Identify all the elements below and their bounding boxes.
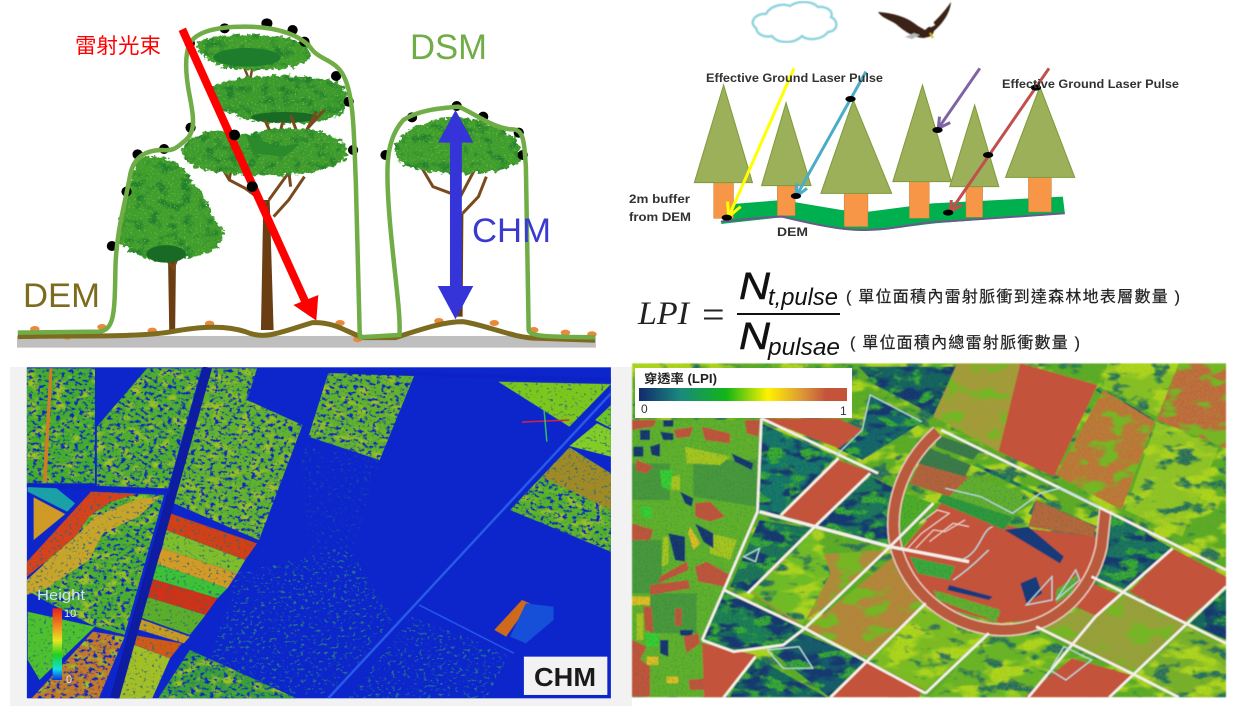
blended block edge (27, 492, 160, 595)
legend max: 10 (64, 608, 76, 620)
tree: left (118, 156, 224, 330)
axis marker (522, 410, 569, 442)
legend max: 1 (840, 404, 847, 418)
denominator subscript: pulsae (767, 334, 840, 361)
right fields (542, 405, 611, 510)
label: from DEM: from DEM (629, 212, 691, 224)
label: effective pulse left: Effective Ground Laser Pulse (706, 71, 883, 85)
icon: cloud (753, 2, 836, 42)
label: DEM: DEM (23, 277, 100, 315)
low-left red block (702, 643, 755, 697)
striped plots north of park (918, 435, 981, 477)
park parcel outlines (908, 510, 969, 548)
field base (632, 363, 1226, 697)
laser return points (722, 85, 1041, 221)
label: 2m buffer: 2m buffer (629, 194, 691, 206)
bright green fields (752, 363, 1226, 697)
arrow: red pulse (950, 68, 1049, 212)
circular park interior (902, 503, 1096, 623)
numerator subscript: t,pulse (768, 284, 838, 311)
legend min: 0 (66, 674, 72, 686)
label: DSM: DSM (410, 28, 487, 67)
tree crowns (694, 85, 1075, 193)
red saturated fields (700, 363, 1226, 697)
road lines (27, 367, 611, 698)
DEM line (721, 213, 1065, 230)
CHM label: CHM (534, 662, 596, 692)
arrow: purple pulse (938, 68, 980, 128)
red strips (119, 513, 257, 698)
LPI term: LPI (637, 296, 691, 332)
legend box (635, 368, 852, 418)
arrow: CHM height (438, 110, 473, 319)
ground buffer strip (721, 197, 1065, 231)
beam return points (229, 130, 258, 192)
tree: right (395, 118, 521, 317)
icon: eagle (878, 2, 951, 39)
fraction bar (737, 313, 840, 315)
arrow: blue pulse (796, 72, 866, 197)
striped green field (28, 612, 95, 680)
blue low canopy base (27, 367, 611, 698)
orange stripe (43, 368, 53, 482)
park dark plots (947, 527, 1064, 603)
light blue boundaries (744, 395, 1099, 680)
label: effective pulse right: Effective Ground Laser Pulse (1002, 77, 1179, 91)
DEM line (18, 322, 595, 340)
ground laser returns (30, 318, 597, 342)
left mottled farmland (632, 420, 760, 697)
tree plot spots (494, 600, 530, 637)
panel: effective ground laser pulse diagram (629, 2, 1179, 239)
roads (702, 418, 1226, 697)
left small fields (34, 497, 65, 540)
ring road (893, 432, 1105, 630)
numerator note: ( 單位面積內雷射脈衝到達森林地表層數量 ) (846, 288, 1180, 306)
ground surface (17, 336, 596, 348)
top of park fields (894, 463, 1096, 622)
tree trunks (714, 177, 1051, 227)
panel: LPI map (632, 363, 1226, 697)
sparse green areas (198, 443, 510, 698)
height legend bar (53, 608, 62, 680)
arrow: yellow pulse (728, 68, 794, 217)
laser returns on canopy (107, 18, 528, 251)
panel: CHM map (10, 367, 632, 706)
legend title: Height (37, 587, 86, 604)
yellow-green solid field (498, 382, 611, 427)
label: CHM: CHM (472, 212, 551, 250)
map frame (10, 367, 632, 706)
arrow: laser beam (182, 29, 318, 321)
DSM line (18, 27, 595, 337)
panel: DEM DSM CHM tree diagram (17, 18, 597, 348)
speckled crop fields (27, 368, 611, 698)
denominator note: ( 單位面積內總雷射脈衝數量 ) (850, 334, 1080, 352)
denominator: N (739, 316, 771, 358)
label: DEM: DEM (777, 227, 808, 239)
legend title: 穿透率 (LPI) (644, 371, 717, 386)
label: laser beam: 雷射光束 (75, 35, 161, 58)
tree: tall middle (181, 34, 348, 330)
orange lower-left field (32, 632, 125, 698)
legend gradient bar (639, 388, 847, 401)
numerator: N (739, 266, 771, 308)
equals sign: = (702, 292, 725, 337)
dark field strips (702, 367, 1226, 697)
legend min: 0 (641, 402, 648, 416)
CHM label box (524, 657, 607, 695)
orange mixed fields (752, 363, 1226, 675)
formula: LPI (637, 266, 1180, 361)
